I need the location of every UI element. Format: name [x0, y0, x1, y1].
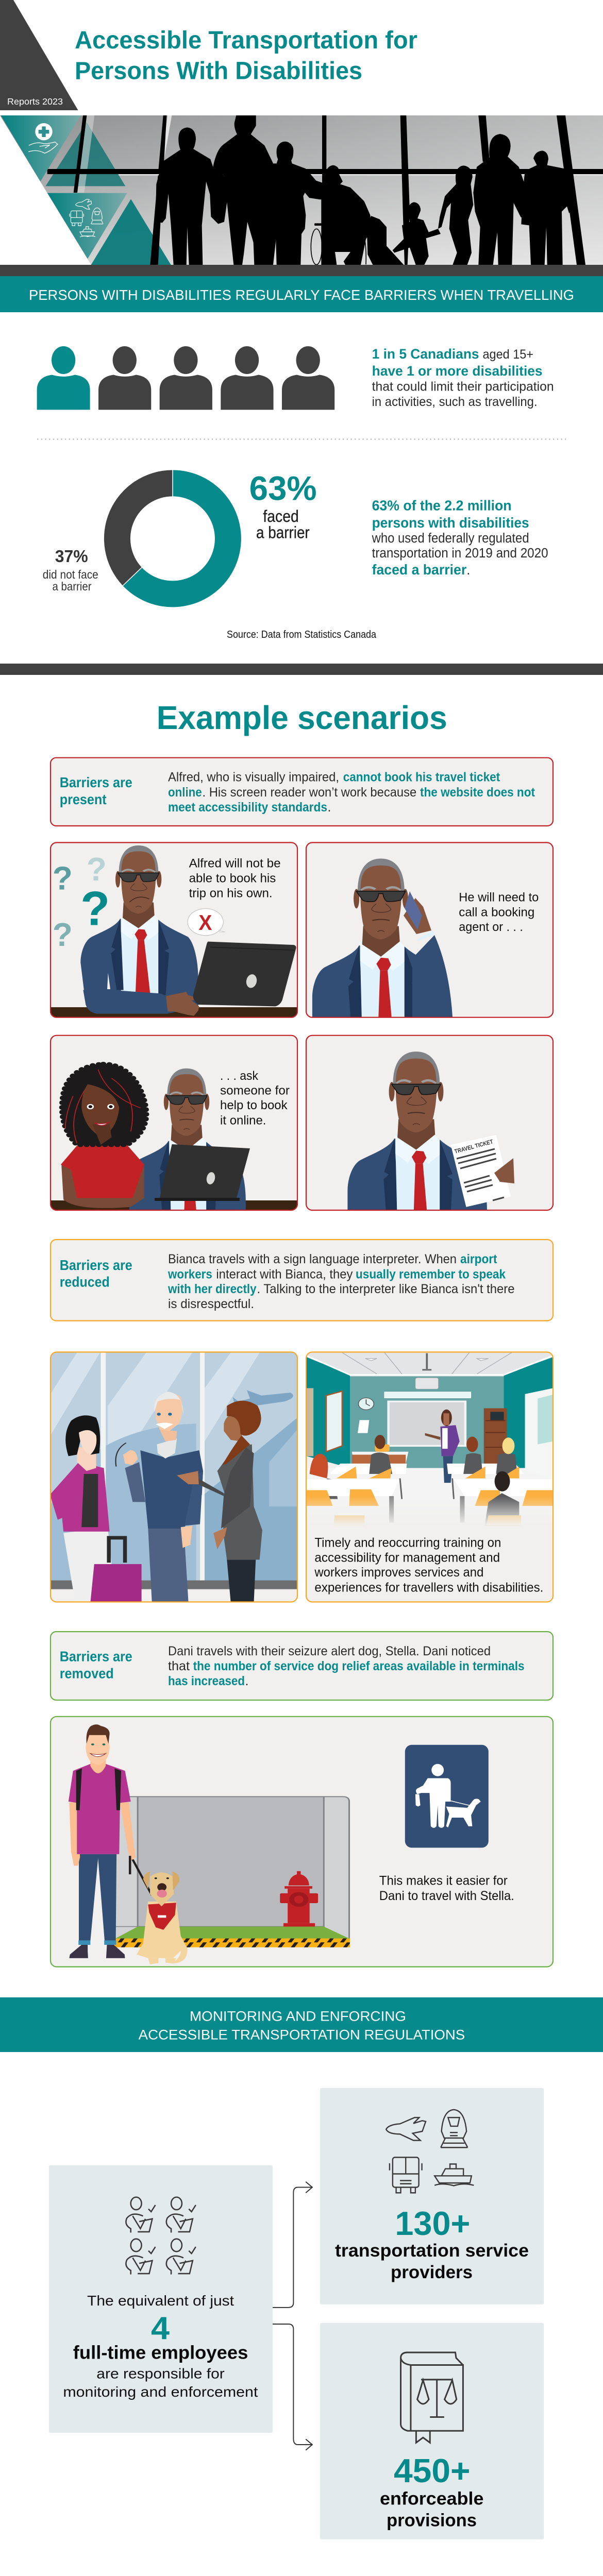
text: 63% of 2.2 million	[372, 497, 548, 578]
Stella the service dog	[130, 1856, 188, 1964]
header triangle with report tag	[0, 0, 78, 110]
callout: barriers are reduced: airport	[460, 1252, 497, 1266]
bookshelf and door	[307, 1388, 552, 1468]
callout: barriers are present: cannot book his travel ticket	[343, 770, 500, 785]
icons: question marks: ?	[80, 882, 110, 936]
panel text: full-time employees	[73, 2342, 248, 2363]
panel text	[314, 1536, 543, 1595]
panel: accessibility training in classroom	[306, 1352, 554, 1602]
panel: Alfred cannot book alone	[51, 842, 298, 1018]
panel text: enforceable	[380, 2488, 483, 2509]
text: 63% of 2.2 million: .	[466, 563, 470, 578]
panel: Dani and Stella at relief area	[51, 1717, 553, 1967]
panel text	[335, 2205, 529, 2282]
woman helping	[61, 1064, 146, 1208]
icon: travel ticket: TRAVEL TICKET	[454, 1139, 494, 1155]
callout: barriers are reduced: interact with Bianca, they	[216, 1267, 353, 1282]
panel text: providers	[391, 2262, 473, 2282]
icons: question marks	[54, 857, 107, 946]
title	[75, 26, 417, 84]
callout: barriers are reduced	[51, 1240, 553, 1321]
silhouette: wheelchair user	[311, 165, 371, 265]
panel text: 4	[151, 2311, 170, 2346]
label: 37% did not face a barrier: 37%	[55, 547, 88, 566]
panel text: . . . ask	[220, 1069, 259, 1083]
text: 63% of 2.2 million: faced a barrier	[372, 562, 466, 578]
arrow: to service providers	[273, 2182, 312, 2308]
silhouette: crouching person	[367, 216, 404, 265]
callout: barriers are reduced: with her directly	[167, 1282, 257, 1296]
heading: Example scenarios: Example scenarios	[157, 699, 447, 736]
icons: question marks: ?	[53, 916, 73, 953]
silhouette: adult	[473, 134, 527, 265]
callout: barriers are present: . His screen reader won’t work because	[202, 785, 416, 800]
callout: barriers are reduced: usually remember to speak	[356, 1267, 506, 1282]
panel text: provisions	[387, 2511, 477, 2531]
panel: Bianca and interpreter at airport	[50, 1352, 297, 1603]
callout: barriers are removed: Dani travels with their seizure alert dog, Stella. Dani noticed	[168, 1644, 491, 1658]
text: 1 in 5 Canadians: in activities, such as travelling.	[372, 395, 538, 409]
icon: fire hydrant	[280, 1871, 318, 1927]
panel text	[63, 2293, 258, 2400]
panel text	[380, 2452, 483, 2531]
icons: question marks: ?	[53, 860, 73, 897]
title: Accessible Transportation for	[75, 26, 417, 54]
callout: barriers are present: online	[168, 785, 202, 800]
label: 63% faced a barrier: faced	[263, 507, 299, 526]
panel text: transportation service	[335, 2241, 529, 2261]
callout: barriers are removed: Barriers are	[60, 1649, 132, 1665]
panel text: agent or . . .	[459, 920, 523, 934]
silhouette: child	[393, 202, 441, 265]
panel: Alfred with travel ticket	[305, 1035, 554, 1211]
source note: Source: Data from Statistics Canada	[227, 629, 377, 640]
callout: barriers are removed: has increased	[168, 1674, 245, 1688]
instructor	[425, 1410, 460, 1483]
icon: four workers	[126, 2197, 196, 2275]
section banner: PERSONS WITH DISABILITIES REGULARLY FACE BARRIERS WHEN TRAVELLING	[29, 287, 574, 303]
label: 37% did not face a barrier: did not face	[43, 568, 98, 581]
clock and wall items	[326, 1391, 374, 1452]
panel text	[220, 1069, 290, 1127]
text: 1 in 5 Canadians: have 1 or more disabilities	[372, 363, 543, 379]
panel text	[189, 856, 281, 901]
callout: barriers are reduced: is disrespectful.	[168, 1297, 254, 1311]
icon: caring hand	[28, 123, 58, 153]
silhouette: man with cane	[156, 127, 228, 265]
text: 1 in 5 Canadians: 1 in 5 Canadians	[372, 346, 479, 362]
icon: law book	[401, 2352, 463, 2443]
icon: service dog relief sign	[405, 1745, 489, 1848]
sign language interpreter	[177, 1401, 262, 1603]
callout: barriers are present	[51, 758, 553, 826]
panel text: call a booking	[459, 906, 534, 919]
panel text: workers improves services and	[314, 1565, 483, 1580]
panel text	[379, 1874, 514, 1903]
panel text: He will need to	[459, 891, 539, 905]
panel text: trip on his own.	[189, 886, 273, 901]
icon: laptop	[155, 1144, 250, 1201]
icon: phone	[405, 891, 422, 930]
dark divider band	[0, 265, 603, 276]
section banner	[0, 276, 603, 312]
Dani	[69, 1724, 136, 1958]
arrow: to enforceable provisions	[273, 2324, 312, 2450]
Bianca's travel companion	[115, 1392, 203, 1603]
panel: asking someone for help	[49, 1035, 298, 1211]
silhouette: girl	[438, 165, 473, 265]
panel text: accessibility for management and	[314, 1550, 500, 1565]
silhouette: adult far right	[521, 150, 573, 265]
icon: travel ticket	[451, 1135, 514, 1207]
panel text: experiences for travellers with disabilities.	[314, 1580, 543, 1595]
whiteboard and projector	[384, 1353, 471, 1446]
panel text: able to book his	[189, 872, 276, 885]
icon: speech bubble with X: X	[198, 910, 212, 935]
callout: barriers are present: meet accessibility standards	[168, 800, 327, 815]
callout: barriers are reduced: reduced	[60, 1274, 110, 1290]
panel text: Timely and reoccurring training on	[314, 1536, 501, 1550]
photo banner: silhouettes of travellers at a window	[0, 115, 603, 265]
text: 1 in 5 Canadians	[372, 346, 554, 409]
section banner: monitoring and enforcing	[0, 1997, 603, 2052]
callout: barriers are removed: that	[168, 1659, 190, 1673]
panel: 450+ enforceable provisions	[320, 2323, 544, 2539]
label: 63% faced a barrier	[249, 469, 317, 541]
panel text: The equivalent of just	[87, 2293, 234, 2309]
icons: plane, train, bus, ship	[386, 2110, 474, 2193]
label: 63% faced a barrier: 63%	[249, 469, 317, 507]
traveller with suitcase	[50, 1415, 142, 1603]
text: 1 in 5 Canadians: aged 15+	[482, 347, 533, 362]
panel text: are responsible for	[96, 2366, 225, 2382]
callout: barriers are present: .	[328, 800, 331, 815]
callout: barriers are present: present	[60, 791, 107, 807]
dark divider band	[0, 664, 603, 675]
panel text: Dani to travel with Stella.	[379, 1889, 514, 1903]
panel: 130+ transportation service providers	[320, 2088, 544, 2304]
text: 63% of 2.2 million: who used federally regulated	[372, 531, 529, 546]
silhouette: tall adult	[213, 115, 282, 265]
callout: barriers are reduced: Bianca travels with a sign language interpreter. When	[168, 1252, 457, 1266]
dog relief area	[114, 1797, 350, 1947]
callout: barriers are removed: .	[245, 1674, 248, 1688]
panel text: 130+	[395, 2205, 470, 2242]
section banner: monitoring and enforcing: MONITORING AND ENFORCING	[190, 2009, 406, 2024]
panel text: This makes it easier for	[379, 1874, 508, 1888]
panel text: it online.	[220, 1114, 266, 1127]
section banner: monitoring and enforcing: ACCESSIBLE TRANSPORTATION REGULATIONS	[139, 2027, 465, 2043]
donut chart: 63% faced a barrier	[104, 470, 241, 607]
panel text: monitoring and enforcement	[63, 2384, 258, 2400]
callout: barriers are reduced: workers	[167, 1267, 212, 1282]
callout: barriers are reduced: . Talking to the interpreter like Bianca isn't there	[257, 1282, 514, 1296]
panel text	[459, 891, 539, 934]
text: 63% of 2.2 million: transportation in 2019 and 2020	[372, 546, 548, 561]
label: 63% faced a barrier: a barrier	[256, 523, 310, 541]
icon: laptop	[193, 941, 296, 1006]
label: 37% did not face a barrier: a barrier	[53, 580, 92, 593]
callout: barriers are present: Barriers are	[60, 774, 132, 790]
title: Persons With Disabilities	[75, 57, 362, 84]
panel text: 450+	[394, 2452, 470, 2489]
callout: barriers are present: the website does not	[420, 785, 535, 800]
panel: Alfred calling an agent	[305, 842, 554, 1018]
text: 63% of 2.2 million: persons with disabilities	[372, 515, 529, 531]
callout: barriers are removed: removed	[60, 1666, 114, 1682]
icon: transport modes	[70, 199, 103, 237]
callout: barriers are removed: the number of service dog relief areas available in terminals	[193, 1659, 525, 1673]
pictogram: 1 in 5 people	[37, 346, 334, 410]
panel text: help to book	[220, 1098, 288, 1112]
callout: barriers are reduced: Barriers are	[60, 1257, 132, 1273]
report tag: Reports 2023	[7, 96, 63, 107]
callout: barriers are present: Alfred, who is visually impaired,	[168, 770, 339, 785]
students and desks	[307, 1435, 553, 1526]
panel: 4 full-time employees	[49, 2165, 273, 2433]
icons: question marks: ?	[87, 851, 107, 888]
icon: speech bubble with X	[188, 909, 225, 936]
panel text: someone for	[220, 1084, 290, 1097]
panel text: Alfred will not be	[189, 856, 281, 871]
silhouette: adult with arm on wheelchair user	[268, 142, 328, 265]
text: 1 in 5 Canadians: that could limit their participation	[372, 380, 554, 394]
label: 37% did not face a barrier	[43, 547, 98, 593]
text: 63% of 2.2 million: 63% of the 2.2 million	[372, 497, 512, 513]
callout: barriers are removed	[51, 1632, 553, 1700]
